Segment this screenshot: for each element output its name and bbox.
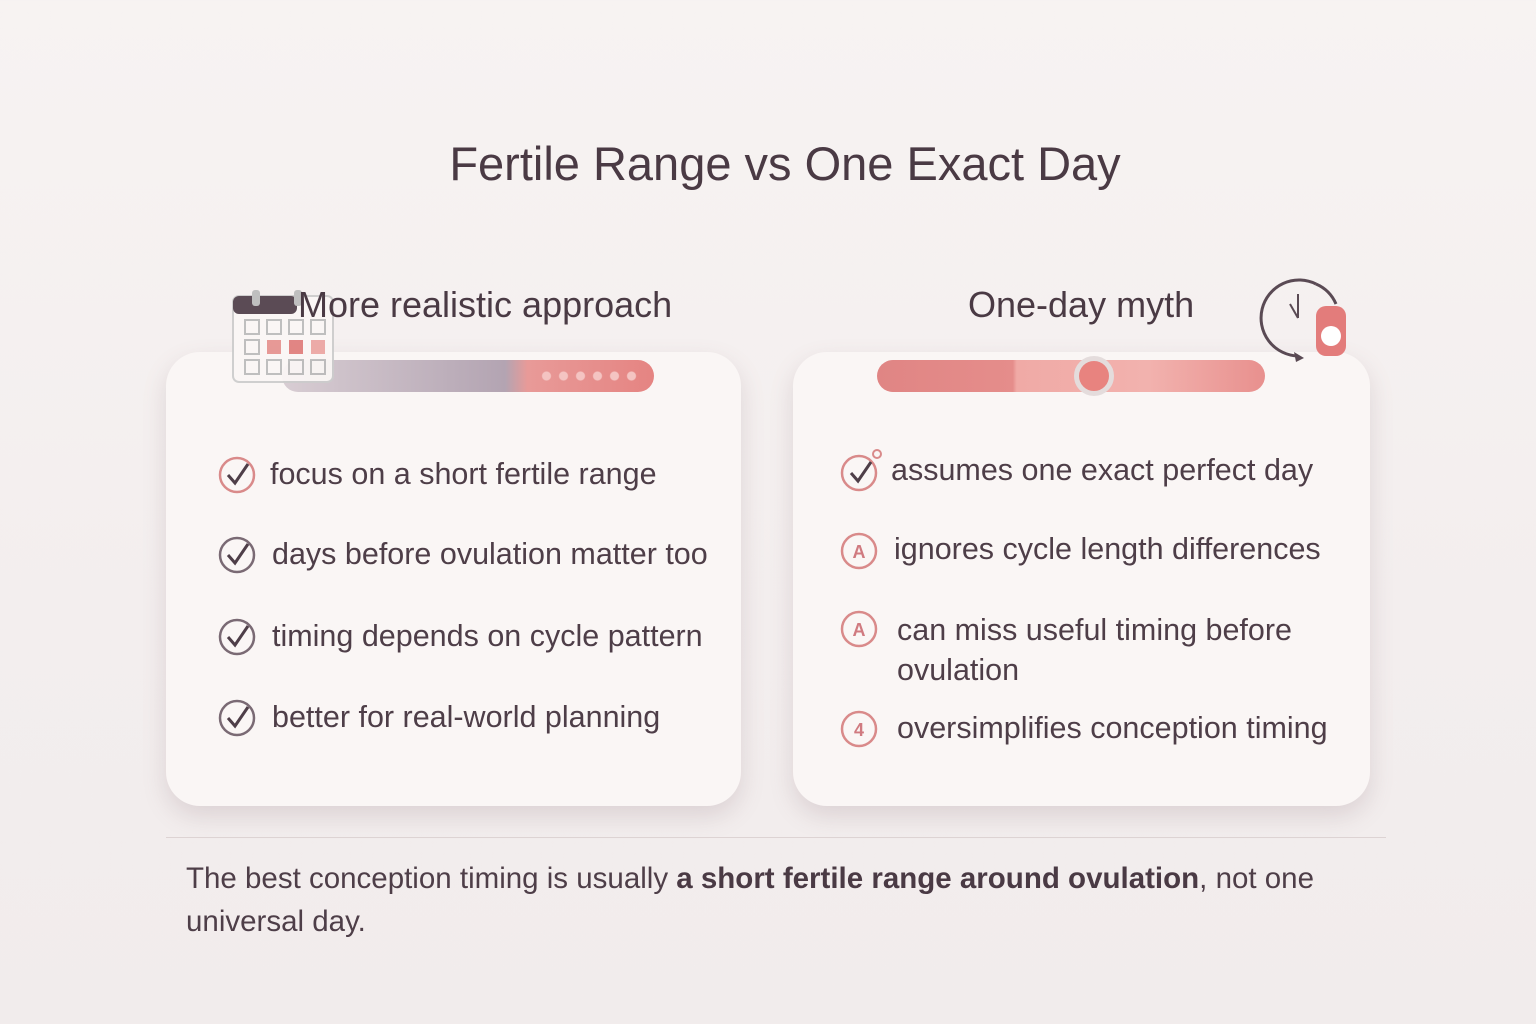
footer text: The best conception timing is usually a short fertile range around ovulation, not one (186, 862, 1314, 895)
item 2: ignores cycle length differences (894, 532, 1321, 566)
item 4: 4 (854, 720, 864, 740)
icon: clock (1260, 278, 1346, 362)
heading: myth: One-day myth (968, 284, 1194, 325)
item 2: days before ovulation matter too (272, 537, 708, 571)
item 3: timing depends on cycle pattern (272, 619, 703, 653)
item 3: ovulation (897, 653, 1019, 687)
panel: realistic approach (166, 352, 741, 806)
footer text (186, 862, 1314, 938)
panel: one-day myth (793, 352, 1370, 806)
item 3: can miss useful timing before (897, 613, 1292, 647)
bar: single day (877, 360, 1265, 392)
marker (1074, 356, 1114, 396)
item 4: better for real-world planning (272, 700, 660, 734)
item 4: oversimplifies conception timing (897, 711, 1328, 745)
footer text: universal day. (186, 905, 366, 938)
dots (538, 371, 638, 381)
item 3: A (852, 620, 866, 640)
list: myth items (840, 449, 1328, 748)
divider (166, 837, 1386, 838)
item 3 (840, 610, 1292, 687)
item 2: A (852, 542, 866, 562)
item 1: focus on a short fertile range (270, 457, 657, 491)
item 1: assumes one exact perfect day (891, 453, 1313, 487)
icon: calendar (232, 290, 334, 383)
list: realistic items (218, 456, 708, 736)
title: Fertile Range vs One Exact Day (449, 137, 1121, 190)
heading: realistic: More realistic approach (298, 284, 672, 325)
bar: range (282, 360, 654, 392)
